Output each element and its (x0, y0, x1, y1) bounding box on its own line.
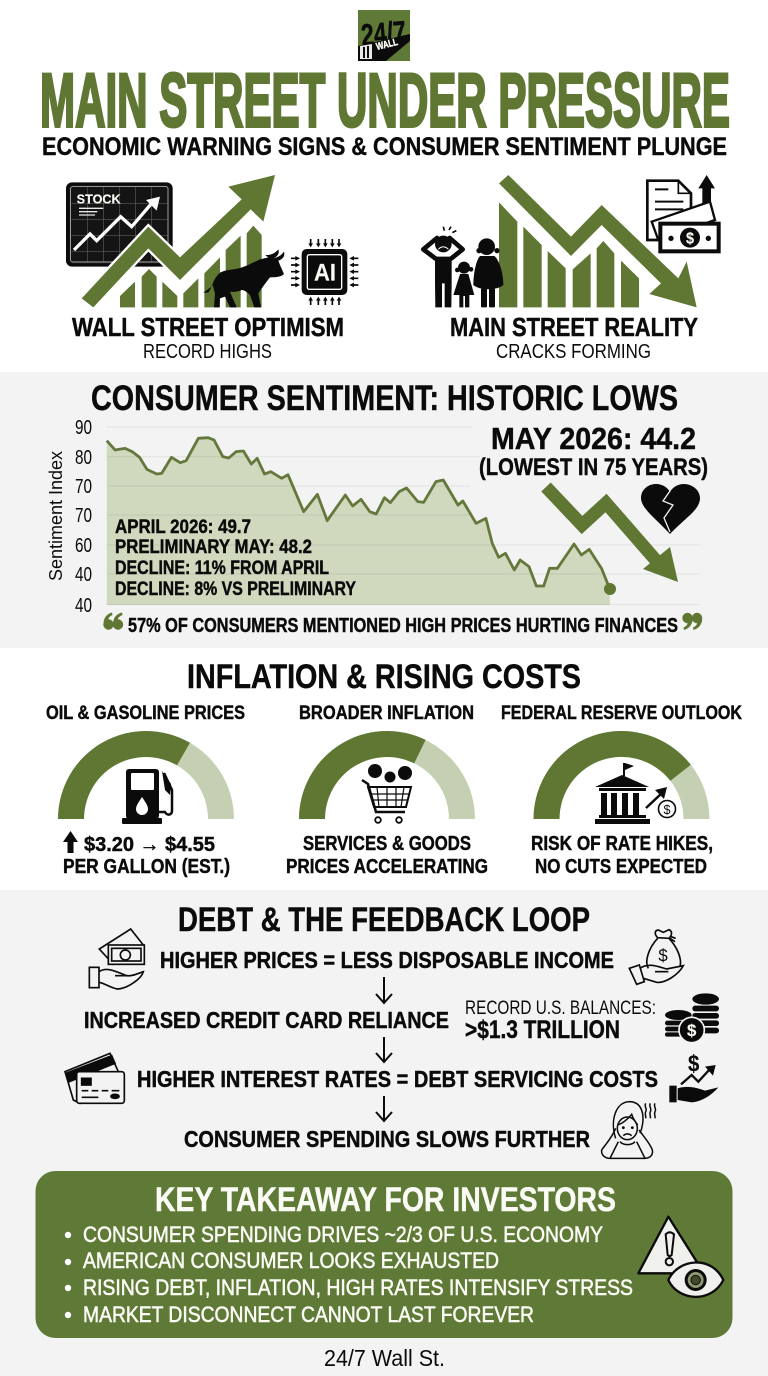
label: wall street optimism: WALL STREET OPTIMISM (72, 312, 344, 342)
column: federal reserve (501, 703, 742, 878)
column: federal reserve: RISK OF RATE HIKES, (531, 833, 713, 855)
line chart: sentiment index: Sentiment Index (46, 451, 66, 581)
logo: 24/7 Wall St (358, 10, 410, 61)
line chart: sentiment index: 40 (75, 595, 92, 617)
icon: cash in hand (89, 929, 144, 989)
text block: sentiment stats: APRIL 2026: 49.7 (115, 517, 251, 538)
callout: record balances: >$1.3 TRILLION (465, 1016, 620, 1044)
panel: consumer sentiment (0, 372, 768, 648)
icon: gas pump (122, 769, 172, 824)
text block: sentiment stats: DECLINE: 11% FROM APRIL (115, 558, 329, 579)
icon: up arrow (63, 831, 78, 853)
icon: bills and document (647, 175, 721, 253)
icon: stressed woman (602, 1102, 656, 1158)
icon: credit cards (65, 1053, 124, 1103)
column: oil and gasoline: OIL & GASOLINE PRICES (46, 703, 245, 724)
icon: closing quote (682, 613, 702, 630)
icon: warning and eye (638, 1217, 723, 1297)
icon: opening quote (103, 612, 123, 630)
label: record highs: RECORD HIGHS (143, 341, 272, 363)
icon: bank with rising rate (595, 763, 676, 824)
arrow: step 1 (376, 977, 392, 1003)
line chart: sentiment index: 40 (75, 564, 92, 586)
text block: sentiment stats: DECLINE: 8% VS PRELIMINARY (115, 579, 356, 600)
panel: main street reality (423, 175, 721, 363)
icon: money bag in hand: $ (658, 946, 668, 966)
heading: key takeaway: KEY TAKEAWAY FOR INVESTORS (155, 1181, 616, 1219)
icon: rising cost hand: $ (688, 1051, 700, 1077)
panel: wall street optimism (67, 175, 358, 363)
panel: debt and the feedback loop (0, 890, 768, 1376)
list: takeaways: MARKET DISCONNECT CANNOT LAST FOREVER (83, 1302, 534, 1327)
bar chart: rising bars (120, 226, 262, 307)
column: federal reserve: NO CUTS EXPECTED (535, 856, 707, 878)
column: broader inflation (286, 703, 488, 878)
line chart: sentiment index: 70 (75, 476, 92, 498)
icon: bank with rising rate: $ (664, 802, 671, 817)
step: higher prices: HIGHER PRICES = LESS DISPOSABLE INCOME (160, 947, 614, 973)
icon: money bag in hand (629, 930, 683, 984)
callout: may 2026: (LOWEST IN 75 YEARS) (479, 454, 708, 481)
column: broader inflation: SERVICES & GOODS (303, 833, 471, 855)
text block: sentiment stats (115, 517, 356, 600)
panel: key takeaway for investors (36, 1171, 732, 1338)
icon: AI chip (291, 239, 358, 305)
bar chart: falling bars (499, 202, 639, 307)
arrow: sentiment drop (546, 487, 678, 582)
line chart: sentiment index (46, 417, 700, 617)
icon: coin stacks (665, 993, 719, 1043)
list: takeaways: RISING DEBT, INFLATION, HIGH RATES INTENSIFY STRESS (83, 1275, 633, 1300)
arrow: step 3 (376, 1096, 392, 1121)
line chart: sentiment index: 60 (75, 535, 92, 557)
arrow: falling green trend (499, 175, 697, 307)
icon: AI chip: AI (314, 260, 336, 287)
heading: inflation: INFLATION & RISING COSTS (187, 658, 581, 696)
logo: 24/7 Wall St: WALL (375, 37, 399, 53)
line chart: sentiment index: 80 (75, 447, 92, 469)
icon: coin stacks: $ (687, 1021, 697, 1040)
callout: may 2026: MAY 2026: 44.2 (491, 421, 696, 456)
icon: stock board: STOCK (77, 191, 121, 206)
column: oil and gasoline (46, 703, 245, 878)
column: oil and gasoline: $3.20 → $4.55 (84, 834, 215, 856)
panel: inflation and rising costs (46, 658, 742, 878)
icon: worried family (423, 227, 503, 307)
icon: rising cost hand (669, 1051, 718, 1102)
callout: record balances (465, 998, 656, 1044)
step: consumer spending slows: CONSUMER SPENDING SLOWS FURTHER (184, 1126, 590, 1152)
step: higher interest: HIGHER INTEREST RATES = DEBT SERVICING COSTS (137, 1066, 658, 1092)
label: main street reality: MAIN STREET REALITY (450, 312, 698, 342)
icon: broken heart (641, 484, 700, 534)
column: oil and gasoline: PER GALLON (EST.) (63, 856, 230, 878)
heading: debt: DEBT & THE FEEDBACK LOOP (178, 901, 590, 939)
arrow: step 2 (376, 1037, 392, 1062)
callout: record balances: RECORD U.S. BALANCES: (465, 998, 656, 1019)
line chart: sentiment index: 70 (75, 505, 92, 527)
icon: bills and document: $ (686, 230, 694, 247)
text block: sentiment stats: PRELIMINARY MAY: 48.2 (115, 537, 312, 558)
arrow: rising green trend (82, 175, 275, 307)
logo: 24/7 Wall St: 24/7 (360, 14, 407, 53)
icon: shopping cart (362, 764, 412, 823)
column: broader inflation: PRICES ACCELERATING (286, 856, 488, 878)
list: takeaways: CONSUMER SPENDING DRIVES ~2/3 OF U.S. ECONOMY (83, 1222, 603, 1247)
footer: 24/7 Wall St. (324, 1345, 445, 1371)
label: cracks forming: CRACKS FORMING (496, 341, 651, 363)
column: broader inflation: BROADER INFLATION (299, 703, 474, 724)
step: credit card reliance: INCREASED CREDIT CARD RELIANCE (84, 1007, 449, 1033)
callout: may 2026 (479, 421, 708, 481)
icon: bull (203, 249, 284, 307)
line chart: sentiment index: 90 (75, 417, 92, 439)
icon: stock board (67, 184, 171, 265)
list: takeaways (65, 1222, 633, 1327)
list: takeaways: AMERICAN CONSUMER LOOKS EXHAUSTED (83, 1248, 499, 1273)
